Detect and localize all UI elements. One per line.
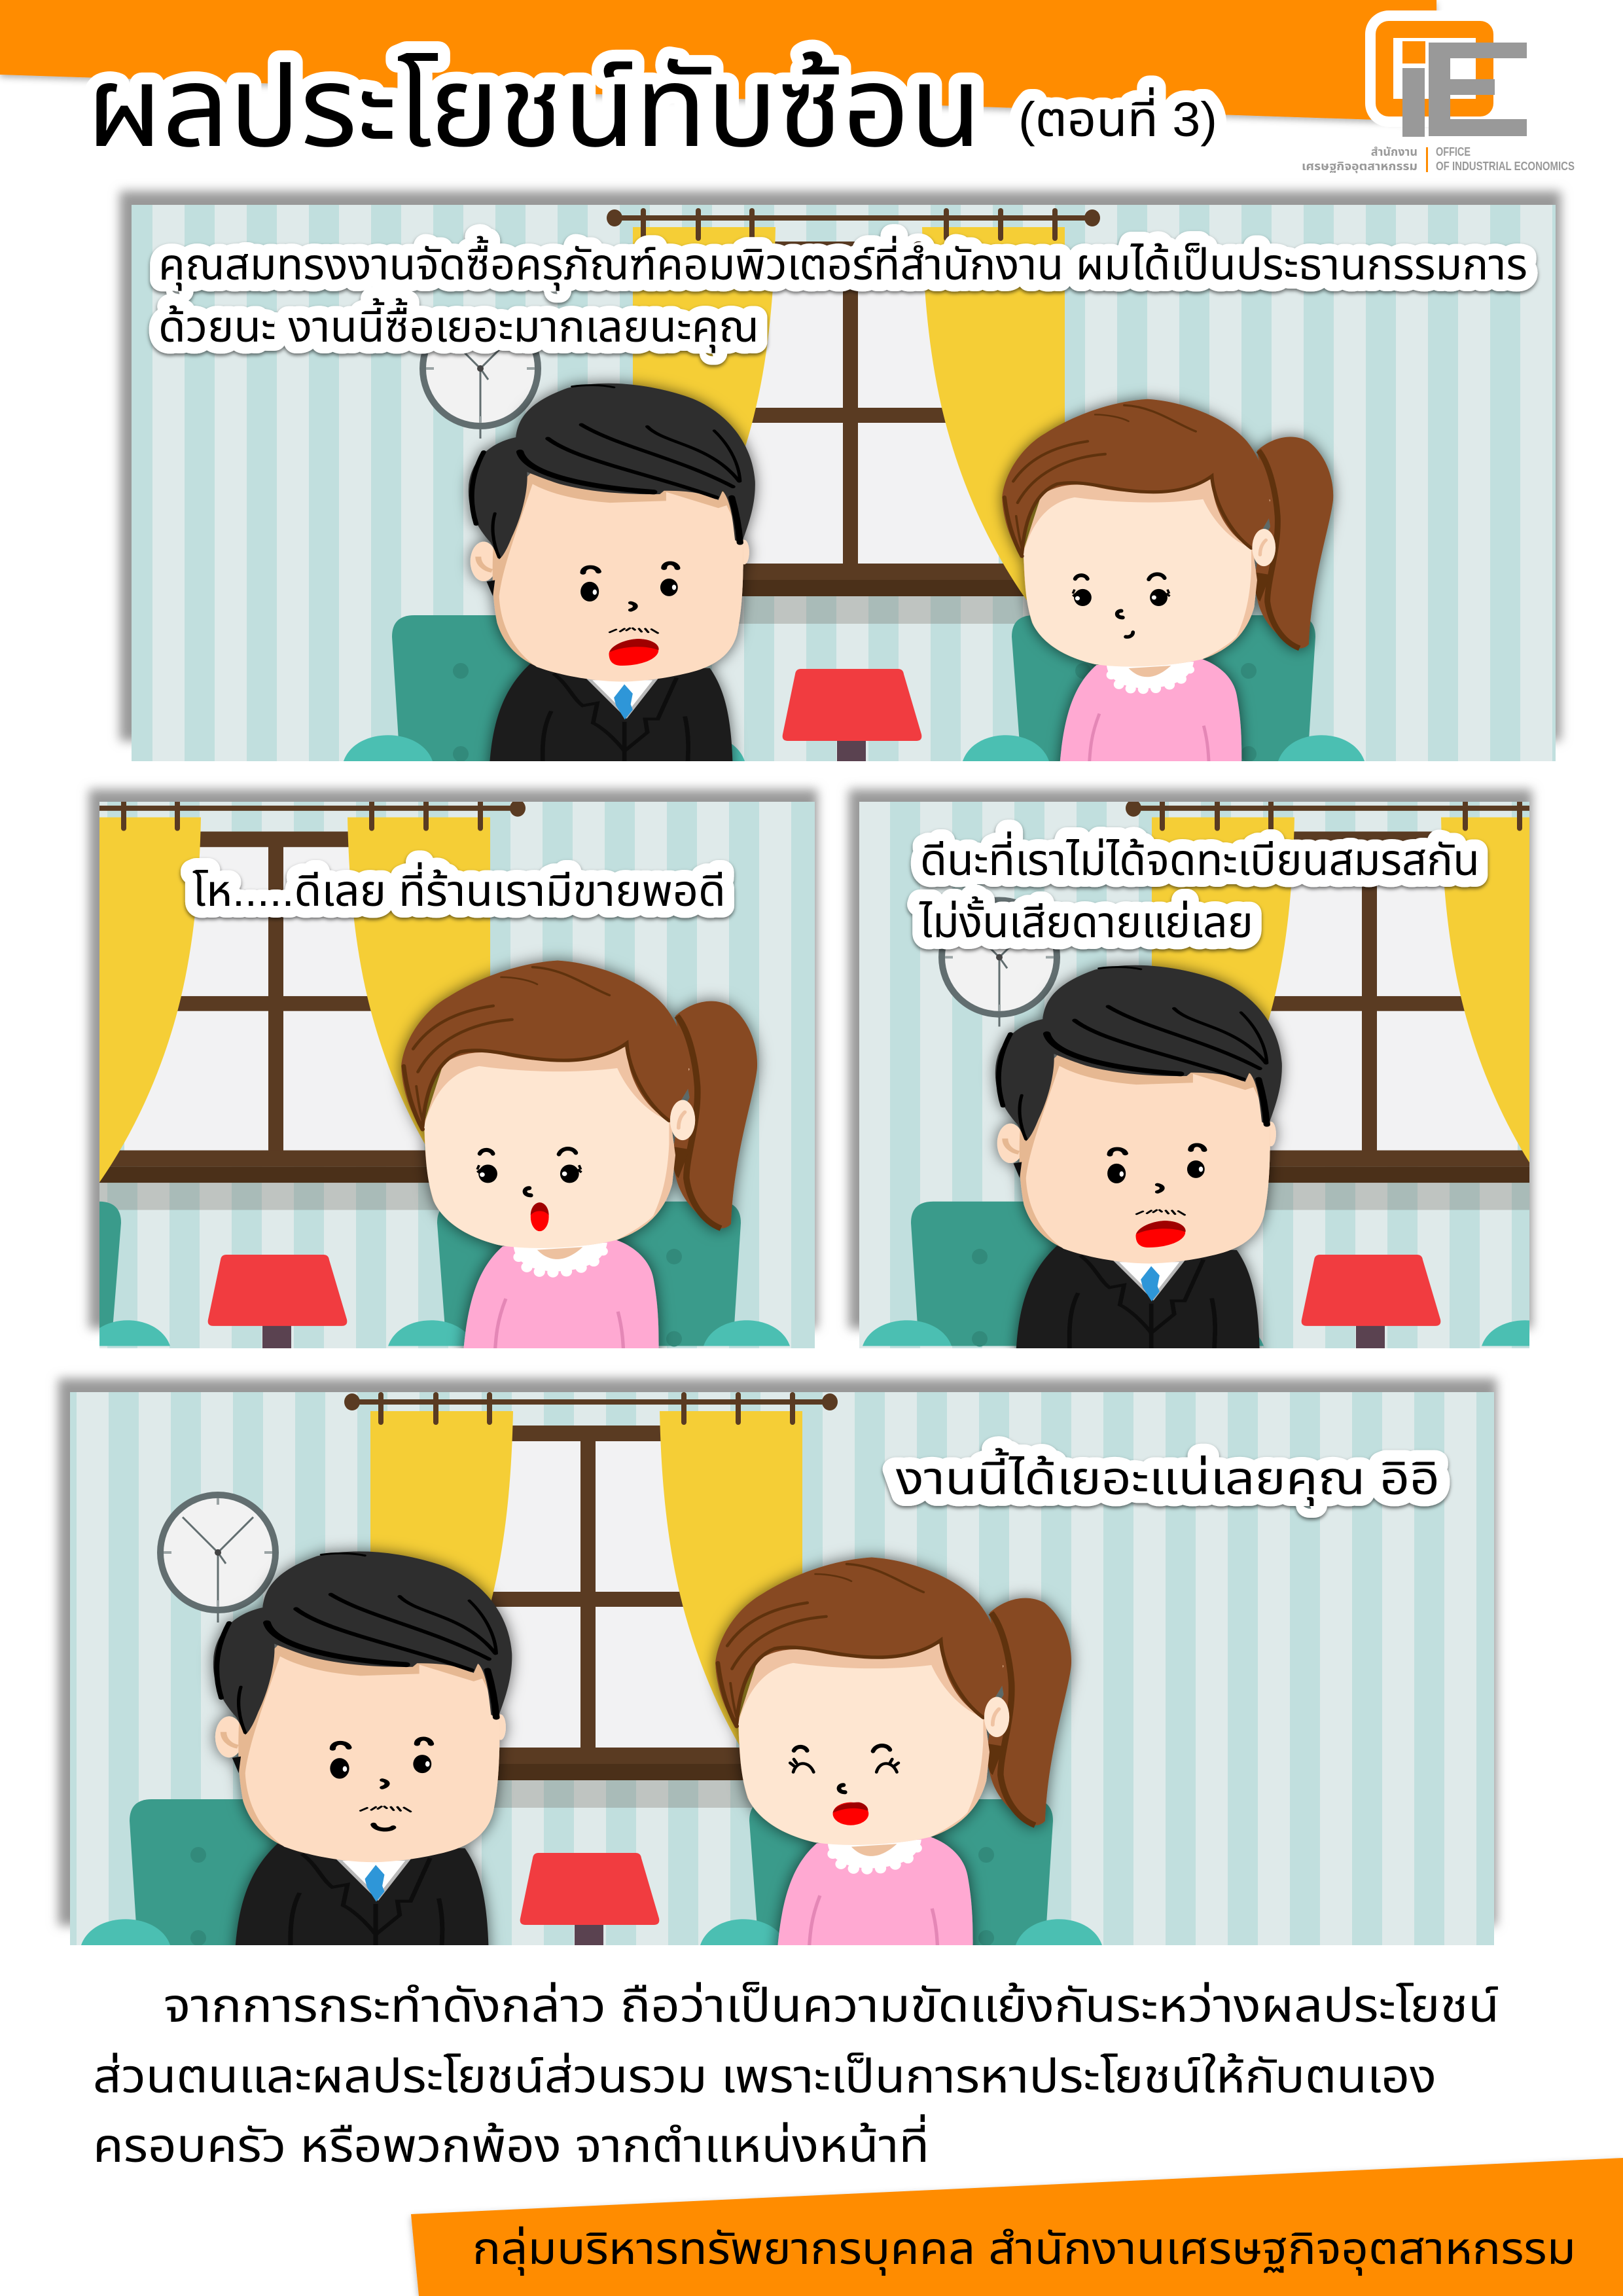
speech text: panel 2: โห.....ดีเลย ที่ร้านเรามีขายพอดี: [192, 862, 726, 915]
speech text: panel 3: ไม่งั้นเสียดายแย่เลย: [919, 896, 1253, 946]
speech text: panel 3: ดีนะที่เราไม่ได้จดทะเบียนสมรสกัน: [920, 831, 1480, 884]
logo: Office of Industrial Economics: [1302, 10, 1575, 173]
character: woman listening: [1002, 399, 1333, 786]
speech text: panel 4: งานนี้ได้เยอะแน่เลยคุณ อิอิ: [896, 1448, 1440, 1506]
body paragraph: [93, 1980, 1499, 2172]
logo: Office of Industrial Economics: OF INDUSTRIAL ECONOMICS: [1436, 160, 1575, 173]
speech text: panel 1: ด้วยนะ งานนี้ซื้อเยอะมากเลยนะคุณ: [158, 298, 759, 353]
panel 1: man tells woman about procurement: [113, 185, 1568, 761]
character: woman speaking: [401, 961, 757, 1376]
subtitle: episode 3: (ตอนที่ 3): [1018, 87, 1217, 147]
speech text: panel 3: [919, 831, 1480, 946]
logo: Office of Industrial Economics: เศรษฐกิจอุตสาหกรรม: [1302, 160, 1418, 173]
body paragraph: ส่วนตนและผลประโยชน์ส่วนรวม เพราะเป็นการหาประโยชน์ให้กับตนเอง: [93, 2051, 1436, 2103]
panel 2: woman replies: [82, 783, 825, 1348]
panel 3: man replies: [842, 783, 1539, 1348]
title: ผลประโยชน์ทับซ้อน: [86, 45, 982, 170]
speech text: panel 1: คุณสมทรงงานจัดซื้อครุภัณฑ์คอมพิวเตอร์ที่สำนักงาน ผมได้เป็นประธานกรรมการ: [158, 236, 1527, 291]
body paragraph: ครอบครัว หรือพวกพ้อง จากตำแหน่งหน้าที่: [93, 2114, 929, 2172]
header banner: [0, 0, 1436, 122]
speech text: panel 1: [158, 236, 1527, 353]
logo: Office of Industrial Economics: OFFICE: [1436, 145, 1471, 158]
character: man smiling: [213, 1551, 512, 1971]
character: woman laughing: [715, 1558, 1071, 1973]
panel 4: both laugh: [51, 1372, 1504, 1945]
body paragraph: จากการกระทำดังกล่าว ถือว่าเป็นความขัดแย้งกันระหว่างผลประโยชน์: [164, 1980, 1499, 2032]
footer banner: [411, 2158, 1623, 2296]
logo: Office of Industrial Economics: สำนักงาน: [1371, 145, 1418, 158]
footer text: department credit: กลุ่มบริหารทรัพยากรบุคคล สำนักงานเศรษฐกิจอุตสาหกรรม: [473, 2224, 1576, 2276]
character: man speaking: [469, 384, 755, 786]
character: man speaking: [995, 965, 1282, 1368]
